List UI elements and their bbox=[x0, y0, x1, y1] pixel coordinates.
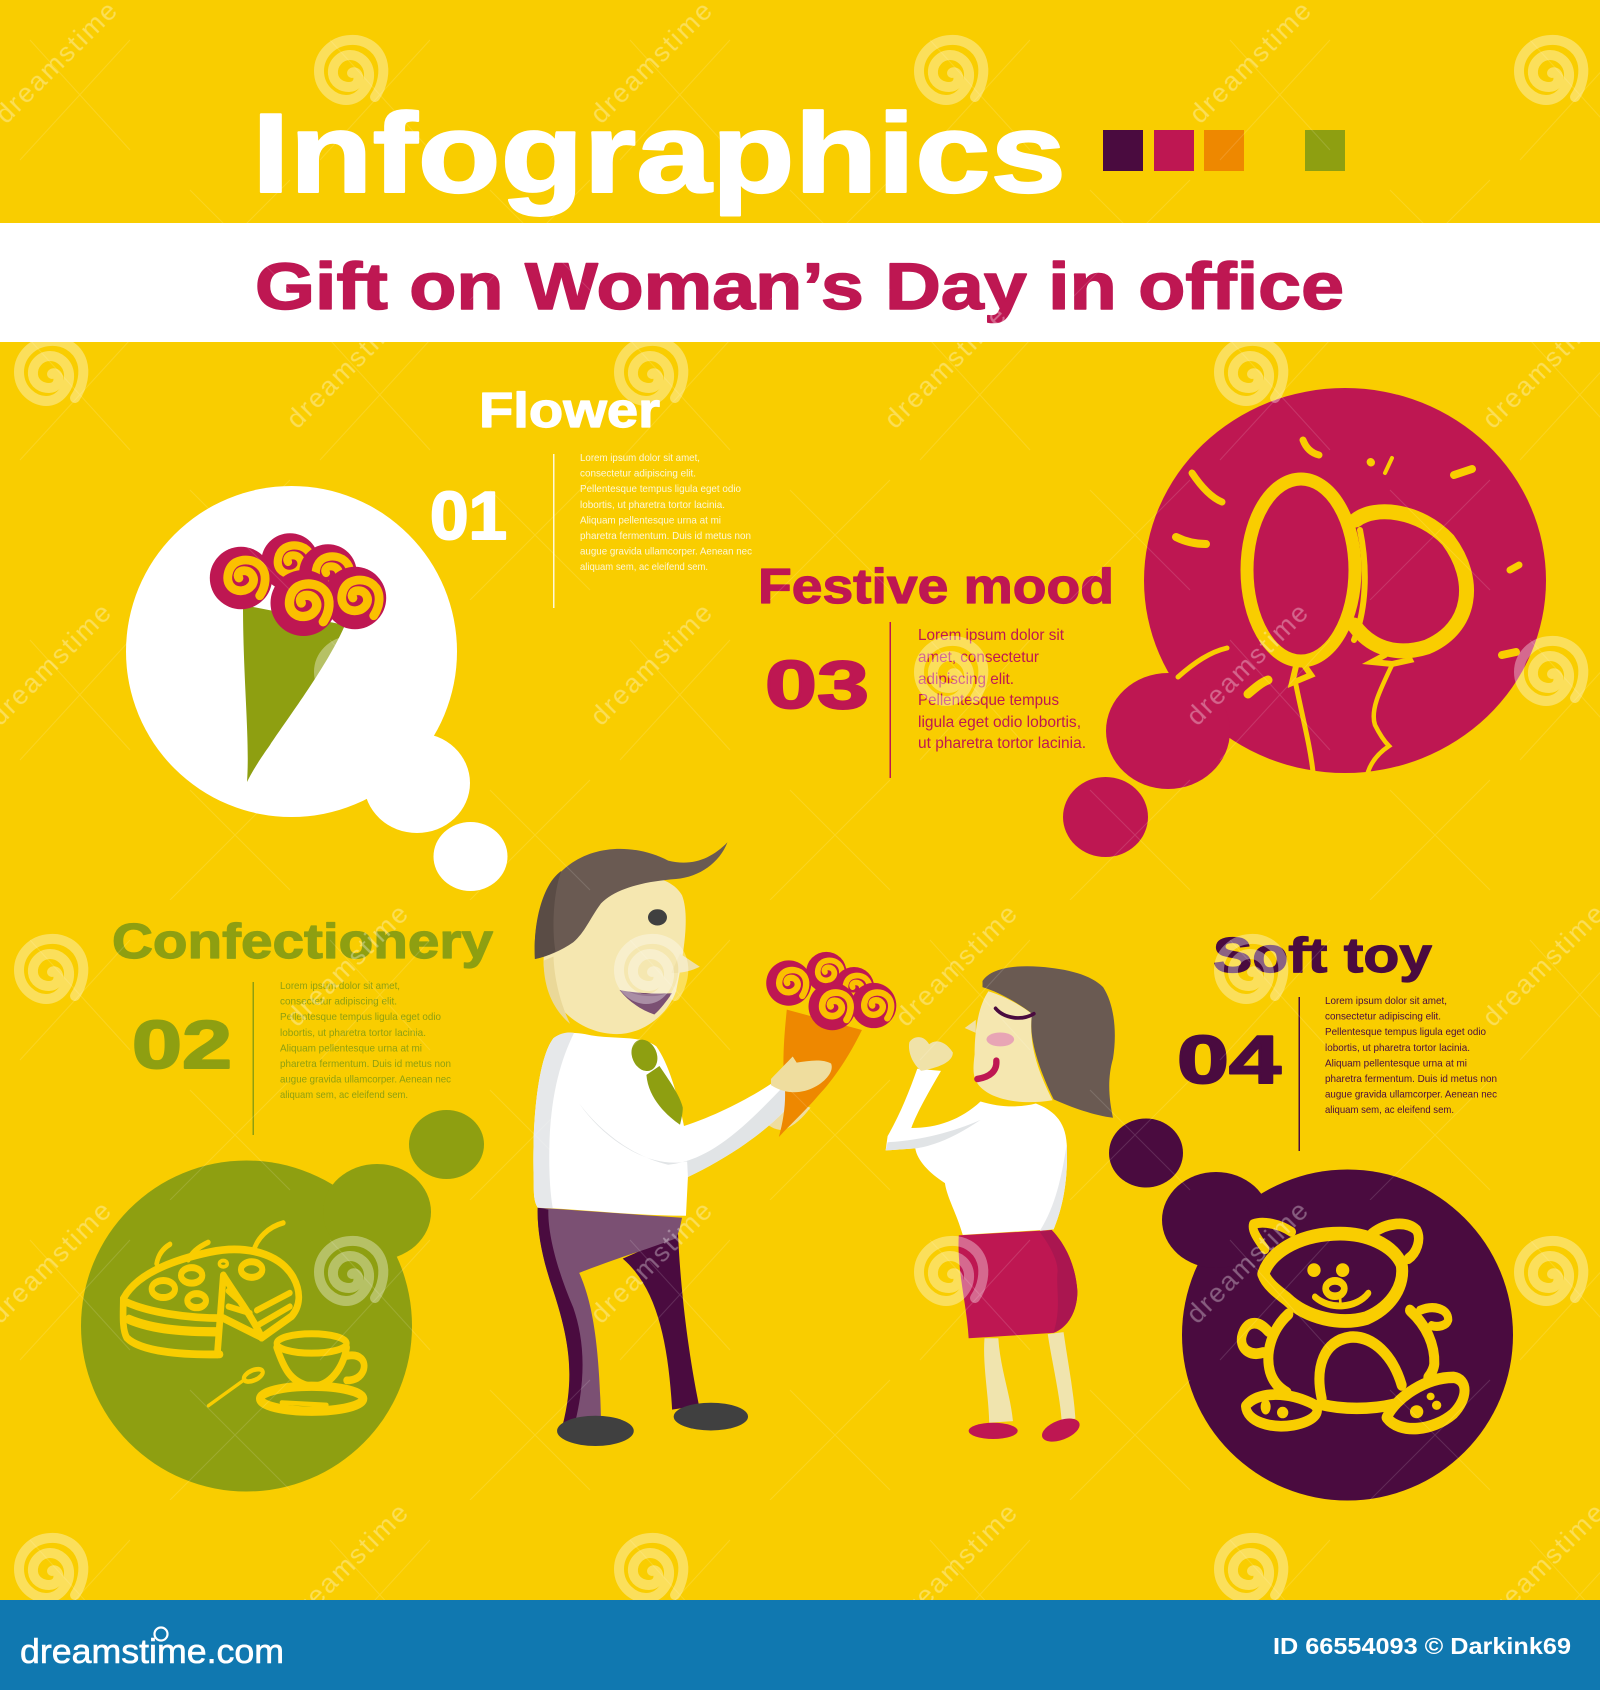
watermark layer: dreamstime bbox=[889, 897, 1024, 1032]
watermark layer: dreamstime bbox=[878, 299, 1013, 434]
heading: confectionery: Confectionery bbox=[112, 915, 493, 969]
man shoes bbox=[557, 1403, 748, 1446]
text block 03: Pellentesque tempus bbox=[918, 692, 1059, 709]
watermark layer: dreamstime bbox=[280, 1496, 415, 1631]
text block 02: Pellentesque tempus ligula eget odio bbox=[280, 1011, 441, 1023]
text block 01: Pellentesque tempus ligula eget odio bbox=[580, 483, 741, 495]
text block 02: augue gravida ullamcorper. Aenean nec bbox=[280, 1074, 451, 1086]
text block 03: adipiscing elit. bbox=[918, 671, 1014, 688]
text block 02: lobortis, ut pharetra tortor lacinia. bbox=[280, 1027, 426, 1039]
watermark layer: dreamstime bbox=[280, 299, 415, 434]
text block 01: Aliquam pellentesque urna at mi bbox=[580, 514, 721, 526]
text block 01: lobortis, ut pharetra tortor lacinia. bbox=[580, 499, 725, 511]
text block 02: aliquam sem, ac eleifend sem. bbox=[280, 1089, 408, 1101]
festive thought bubble bbox=[1063, 388, 1546, 857]
text block 04: Lorem ipsum dolor sit amet, bbox=[1325, 995, 1447, 1007]
number 01: 01 bbox=[430, 478, 507, 554]
heading: flower: Flower bbox=[479, 384, 660, 438]
icon: bouquet bbox=[210, 533, 386, 782]
soft toy thought bubble bbox=[1109, 1118, 1513, 1500]
heading: festive mood: Festive mood bbox=[758, 560, 1114, 614]
man head bbox=[535, 842, 727, 1034]
woman legs bbox=[984, 1332, 1075, 1423]
man lower hand bbox=[759, 1099, 811, 1130]
subtitle: Gift on Woman’s Day in office bbox=[255, 249, 1344, 323]
text block 04: augue gravida ullamcorper. Aenean nec bbox=[1325, 1089, 1497, 1101]
text block 02: consectetur adipiscing elit. bbox=[280, 996, 397, 1008]
icon: cake and cup bbox=[123, 1223, 364, 1411]
panel: soft toy bbox=[1109, 929, 1513, 1500]
illustration: man with bouquet bbox=[533, 842, 896, 1446]
subtitle band bbox=[0, 223, 1600, 342]
text block 02: Aliquam pellentesque urna at mi bbox=[280, 1042, 422, 1054]
woman fist bbox=[909, 1037, 953, 1071]
text block 04: Pellentesque tempus ligula eget odio bbox=[1325, 1026, 1486, 1038]
text block 01 bbox=[580, 452, 752, 573]
text block 03: ut pharetra tortor lacinia. bbox=[918, 735, 1086, 752]
watermark layer: dreamstime bbox=[280, 897, 415, 1032]
woman shoes bbox=[969, 1414, 1083, 1446]
watermark layer: dreamstime bbox=[584, 596, 719, 731]
text block 02 bbox=[280, 980, 451, 1101]
footer credit: ID 66554093 © Darkink69 bbox=[1273, 1633, 1571, 1659]
text block 01: pharetra fermentum. Duis id metus non bbox=[580, 530, 751, 542]
divider 01 bbox=[553, 454, 554, 608]
footer bar bbox=[0, 1600, 1600, 1690]
man bouquet bbox=[766, 952, 896, 1137]
divider 03 bbox=[890, 622, 891, 778]
illustration: woman bbox=[886, 966, 1115, 1446]
man shirt bbox=[533, 1032, 801, 1216]
man upper hand bbox=[771, 1057, 832, 1092]
watermark layer: dreamstime bbox=[584, 1194, 719, 1329]
divider 04 bbox=[1298, 997, 1300, 1151]
woman blouse bbox=[886, 1069, 1067, 1235]
number 03: 03 bbox=[765, 647, 869, 723]
text block 04: lobortis, ut pharetra tortor lacinia. bbox=[1325, 1042, 1470, 1054]
man legs bbox=[538, 1208, 699, 1427]
icon: balloons bbox=[1176, 440, 1519, 772]
text block 04: Aliquam pellentesque urna at mi bbox=[1325, 1057, 1467, 1069]
text block 02: Lorem ipsum dolor sit amet, bbox=[280, 980, 400, 992]
number 04: 04 bbox=[1177, 1022, 1281, 1098]
text block 03 bbox=[918, 627, 1086, 752]
text block 03: Lorem ipsum dolor sit bbox=[918, 627, 1065, 644]
divider 02 bbox=[252, 982, 254, 1135]
woman hair back bbox=[983, 966, 1115, 1118]
title: Infographics bbox=[252, 90, 1066, 216]
text block 04: aliquam sem, ac eleifend sem. bbox=[1325, 1104, 1454, 1116]
watermark layer: dreamstime bbox=[889, 1496, 1024, 1631]
panel: flower bbox=[126, 384, 752, 891]
text block 04 bbox=[1325, 995, 1497, 1116]
faint spiral on bubble bbox=[319, 641, 383, 701]
text block 01: aliquam sem, ac eleifend sem. bbox=[580, 561, 708, 573]
heading: soft toy: Soft toy bbox=[1213, 929, 1432, 983]
text block 01: Lorem ipsum dolor sit amet, bbox=[580, 452, 700, 464]
number 02: 02 bbox=[132, 1007, 232, 1083]
footer logo: dreamstime.com bbox=[20, 1633, 284, 1671]
flower thought bubble bbox=[126, 486, 508, 891]
text block 04: consectetur adipiscing elit. bbox=[1325, 1011, 1441, 1023]
text block 03: amet, consectetur bbox=[918, 649, 1040, 666]
panel: confectionery bbox=[81, 915, 493, 1492]
text block 03: ligula eget odio lobortis, bbox=[918, 714, 1081, 731]
man tie bbox=[627, 1035, 683, 1125]
watermark layer: dreamstime bbox=[1180, 1194, 1315, 1329]
text block 01: augue gravida ullamcorper. Aenean nec bbox=[580, 546, 752, 558]
icon: teddy bear bbox=[1241, 1223, 1465, 1429]
woman skirt bbox=[959, 1230, 1077, 1338]
confectionery thought bubble bbox=[81, 1110, 484, 1492]
panel: festive mood bbox=[758, 388, 1546, 857]
colour squares bbox=[1103, 130, 1345, 171]
watermark layer: dreamstime bbox=[1180, 596, 1315, 731]
text block 04: pharetra fermentum. Duis id metus non bbox=[1325, 1073, 1497, 1085]
text block 02: pharetra fermentum. Duis id metus non bbox=[280, 1058, 451, 1070]
text block 01: consectetur adipiscing elit. bbox=[580, 468, 696, 480]
woman face bbox=[965, 991, 1052, 1102]
